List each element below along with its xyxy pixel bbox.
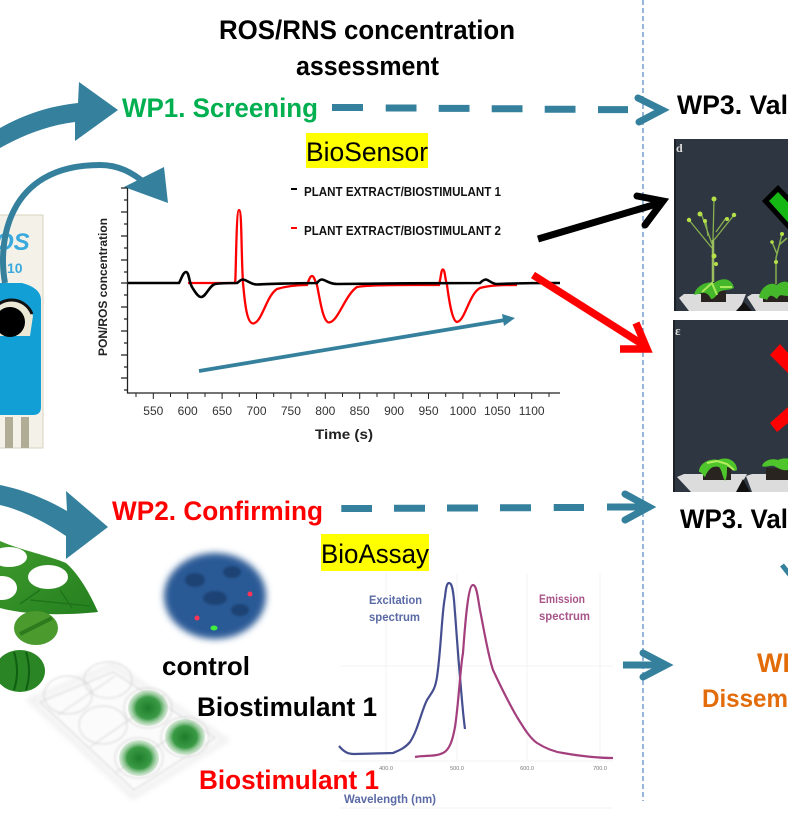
- label: Biostimulant 1 black: Biostimulant 1: [197, 692, 377, 722]
- label: WP1. Screening: WP1. Screening: [122, 93, 318, 123]
- arrow: teal arrow to dissemination: [623, 653, 666, 677]
- wavelength tick labels: 500.0: [450, 766, 464, 772]
- legend: PLANT EXTRACT/BIOSTIMULANT 2: [304, 224, 501, 238]
- photo panel e: plants without flowers: [673, 320, 788, 492]
- photo panel d: plants with flowers: d: [676, 141, 683, 155]
- chart x-axis tick labels: 800: [315, 404, 336, 418]
- rosette 1: [694, 279, 734, 299]
- emission label: Emission: [539, 594, 585, 606]
- green wells: [119, 690, 205, 776]
- plant 2: [772, 234, 787, 284]
- chart x-axis tick labels: 1000: [450, 404, 477, 418]
- wavelength tick labels: [379, 766, 607, 772]
- arrow: big curved arrow to WP1: [0, 82, 118, 148]
- icon: well plate with green wells: [30, 662, 226, 797]
- wavelength axis title: Wavelength (nm): [344, 794, 436, 806]
- chart x-axis tick labels: 750: [281, 404, 301, 418]
- legend: PLANT EXTRACT/BIOSTIMULANT 1: [304, 185, 501, 199]
- arrow: black arrow to panel d: [538, 196, 663, 239]
- chart x-axis tick labels: 1100: [519, 404, 545, 418]
- icon: green check mark: [762, 185, 788, 237]
- emission label: [539, 594, 590, 623]
- chart x-axis tick labels: 550: [143, 404, 164, 418]
- heading: ROS/RNS concentration assessment: ROS/RNS concentration: [219, 15, 515, 45]
- photo panel e: plants without flowers: ε: [675, 323, 681, 338]
- label: Biostimulant 1 red: Biostimulant 1: [199, 765, 379, 795]
- chart axes: [128, 188, 560, 393]
- photo panel d: plants with flowers: [674, 139, 788, 311]
- arrow: red arrow to panel e: [533, 275, 647, 349]
- icon: biosensor strip: 10: [7, 260, 23, 276]
- chart: excitation and emission spectrum: [339, 573, 613, 808]
- chart x-axis tick labels: [143, 404, 545, 418]
- arrow: dashed WP1 to WP3: [332, 98, 662, 122]
- icon: biosensor strip: [0, 215, 43, 448]
- emission label: spectrum: [539, 611, 590, 623]
- chart x-axis title: Time (s): [315, 427, 373, 442]
- excitation label: [369, 595, 422, 624]
- excitation curve: [339, 583, 465, 754]
- chart x-axis tick labels: 850: [350, 404, 370, 418]
- label: WP dissemination: [702, 648, 788, 713]
- label: BioAssay: BioAssay: [321, 539, 429, 569]
- plant 1: [689, 199, 734, 282]
- icon: leaf and leaf discs: [0, 541, 98, 692]
- label: WP2. Confirming: WP2. Confirming: [112, 496, 323, 526]
- icon: red cross: [770, 344, 788, 432]
- pots: [677, 474, 747, 492]
- label: control: control: [162, 651, 250, 681]
- emission curve: [415, 585, 613, 758]
- label: WP3 validation top: WP3. Val: [677, 90, 788, 120]
- label: BioSensor: BioSensor: [306, 137, 428, 167]
- wavelength tick labels: 700.0: [593, 766, 607, 772]
- black curve: [128, 272, 560, 297]
- excitation label: spectrum: [369, 612, 420, 624]
- chart: PON/ROS concentration over time: [98, 185, 560, 442]
- chart x-axis tick labels: 700: [246, 404, 267, 418]
- chart x-axis tick labels: 950: [418, 404, 439, 418]
- red curve: [188, 210, 517, 324]
- image: control microscopy cell: [164, 553, 266, 639]
- arrow: big curved arrow to WP2: [0, 485, 108, 559]
- arrow: small teal arrow right edge: [782, 565, 788, 575]
- heading: ROS/RNS concentration assessment: assessment: [296, 51, 439, 81]
- wavelength tick labels: 600.0: [520, 766, 534, 772]
- divider: vertical dashed line: [642, 0, 644, 801]
- rosettes: [699, 458, 737, 481]
- chart x-axis tick labels: 900: [384, 404, 404, 418]
- arrow: curved arrow from sensor to chart: [3, 165, 168, 283]
- chart x-axis tick labels: 600: [178, 404, 198, 418]
- chart y-axis title: PON/ROS concentration: [98, 218, 110, 356]
- arrow: rising trend in chart: [199, 314, 515, 371]
- excitation label: Excitation: [369, 595, 422, 607]
- legend: [291, 185, 501, 238]
- chart x-axis tick labels: 650: [212, 404, 232, 418]
- wavelength tick labels: 400.0: [379, 766, 393, 772]
- arrow: dashed WP2 to WP3: [341, 494, 649, 520]
- chart x-axis tick labels: 1050: [484, 404, 511, 418]
- pots: [679, 294, 746, 311]
- heading: ROS/RNS concentration assessment: [219, 15, 515, 81]
